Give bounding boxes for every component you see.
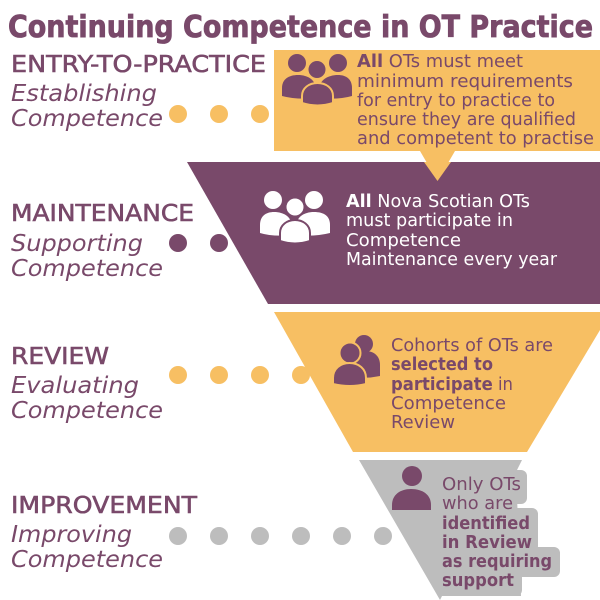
review dots	[169, 366, 310, 384]
improvement subheading: Improving	[11, 522, 132, 548]
entry description: minimum requirements	[357, 72, 573, 92]
panel: improvement funnel band	[359, 460, 560, 600]
entry description	[357, 52, 594, 149]
entry description: All OTs must meet	[357, 52, 523, 72]
maintenance description: All Nova Scotian OTs	[346, 192, 530, 212]
improvement description: identified	[442, 514, 530, 534]
review description: Competence	[391, 394, 506, 414]
icon: group of three, purple	[282, 54, 352, 106]
improvement description: who are	[442, 494, 513, 514]
improvement description	[442, 475, 552, 591]
review description: Cohorts of OTs are	[391, 336, 553, 356]
maintenance subheading: Competence	[11, 256, 163, 282]
review subheading: Evaluating	[11, 373, 139, 399]
maintenance dots	[169, 234, 228, 252]
entry dots	[169, 105, 269, 123]
entry description: for entry to practice to	[357, 91, 555, 111]
panel: maintenance funnel band	[187, 162, 600, 304]
maintenance description	[346, 192, 558, 270]
improvement description: as requiring	[442, 552, 552, 572]
entry subheading	[11, 81, 163, 132]
maintenance description: must participate in	[346, 211, 513, 231]
improvement description: in Review	[442, 533, 532, 553]
maintenance heading: MAINTENANCE	[11, 201, 194, 227]
improvement heading: IMPROVEMENT	[11, 493, 198, 519]
panel: entry-to-practice	[274, 50, 600, 181]
improvement dots	[169, 527, 392, 545]
improvement description: Only OTs	[442, 475, 521, 495]
icon: group of three, white	[260, 191, 330, 244]
maintenance subheading: Supporting	[11, 231, 143, 257]
review description: participate in	[391, 375, 513, 395]
review description: selected to	[391, 355, 493, 375]
entry subheading: Establishing	[11, 81, 157, 107]
callout pointer	[424, 162, 451, 181]
review description: Review	[391, 413, 455, 433]
review subheading	[11, 373, 163, 424]
entry description: ensure they are qualified	[357, 110, 576, 130]
improvement subheading	[11, 522, 163, 573]
panel: review funnel band	[274, 312, 600, 452]
improvement subheading: Competence	[11, 547, 163, 573]
improvement description: support	[442, 571, 514, 591]
maintenance description: Maintenance every year	[346, 250, 558, 270]
maintenance subheading	[11, 231, 163, 282]
review subheading: Competence	[11, 398, 163, 424]
review heading: REVIEW	[11, 344, 109, 370]
icon: single person	[392, 466, 431, 510]
entry description: and competent to practise	[357, 129, 594, 149]
review description	[391, 336, 553, 433]
maintenance description: Competence	[346, 231, 461, 251]
icon: two people	[333, 335, 380, 386]
entry heading: ENTRY-TO-PRACTICE	[11, 52, 266, 78]
entry subheading: Competence	[11, 106, 163, 132]
